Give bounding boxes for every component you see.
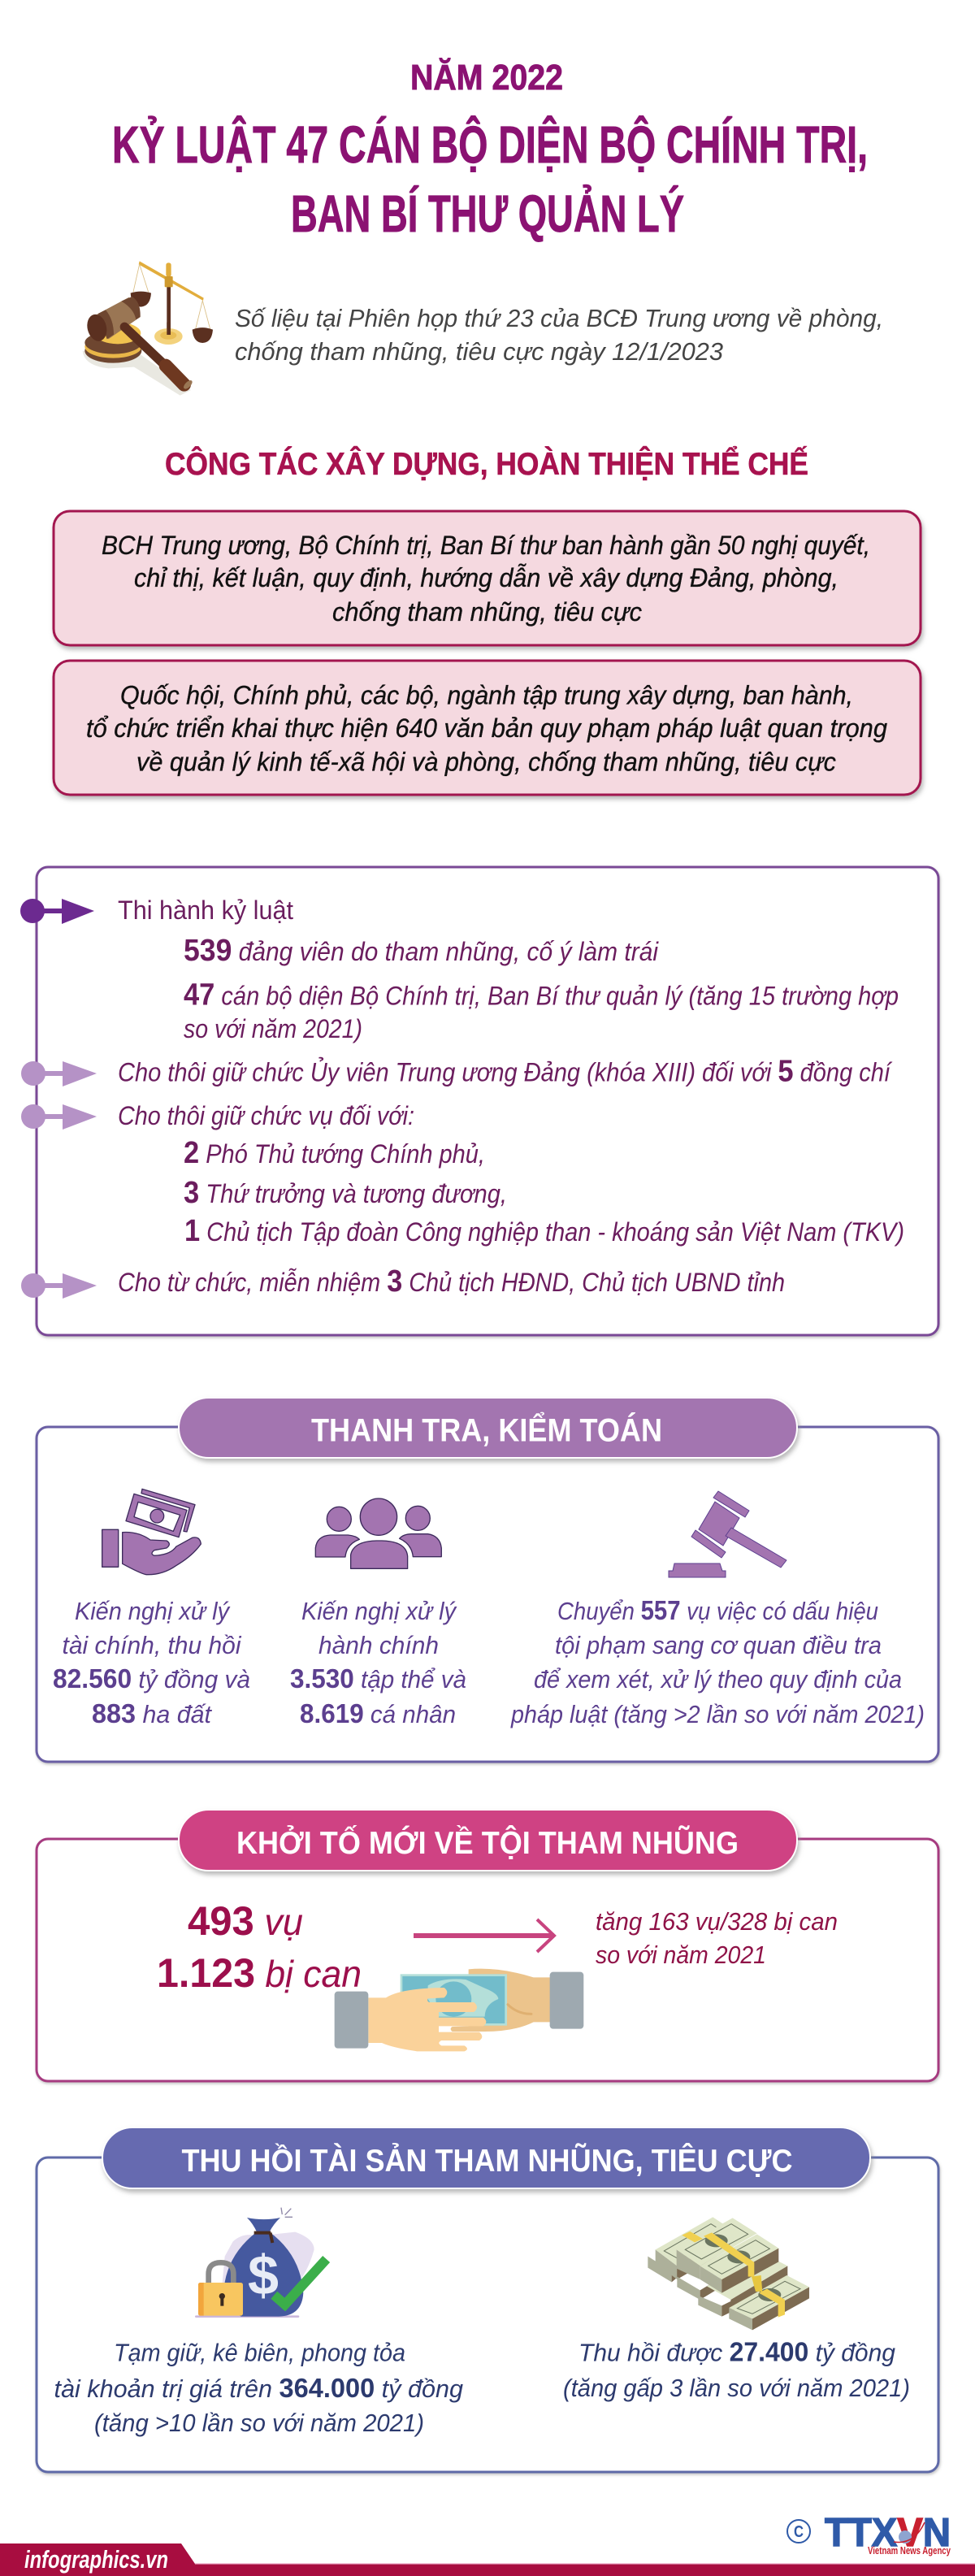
discipline list text: so với năm 2021)	[184, 1014, 362, 1043]
discipline list text: 47 cán bộ diện Bộ Chính trị, Ban Bí thư quản lý (tăng 15 trường hợp	[184, 978, 899, 1013]
column 1 text: 883 ha đất	[92, 1698, 212, 1728]
pill heading: asset recovery: THU HỒI TÀI SẢN THAM NHŨNG, TIÊU CỰC	[182, 2143, 793, 2179]
comparison text: so với năm 2021	[596, 1941, 766, 1969]
discipline list text	[118, 896, 904, 1299]
footer bar	[0, 2543, 975, 2576]
column 3 text: để xem xét, xử lý theo quy định của	[534, 1665, 902, 1693]
title block	[112, 57, 868, 243]
heading: institution building: CÔNG TÁC XÂY DỰNG, HOÀN THIỆN THỂ CHẾ	[165, 445, 808, 482]
column 2 text: 3.530 tập thể và	[290, 1663, 466, 1693]
footer bar: infographics.vn	[24, 2545, 168, 2574]
panel: discipline	[20, 867, 938, 1335]
panel: asset recovery	[37, 2127, 938, 2472]
logo: TTXVN: C	[794, 2523, 804, 2541]
discipline list text: 1 Chủ tịch Tập đoàn Công nghiệp than - khoáng sản Việt Nam (TKV)	[184, 1214, 904, 1248]
pill heading: inspection: THANH TRA, KIỂM TOÁN	[311, 1411, 662, 1448]
discipline list text: 3 Thứ trưởng và tương đương,	[184, 1176, 507, 1210]
icon: gavel purple	[669, 1491, 786, 1577]
icon: money bag with lock and check	[195, 2208, 327, 2318]
left recovery text: tài khoản trị giá trên 364.000 tỷ đồng	[54, 2373, 463, 2403]
arrow	[414, 1919, 554, 1952]
column 2 text: Kiến nghị xử lý	[301, 1597, 457, 1625]
pill heading: inspection	[179, 1398, 797, 1458]
pill heading: asset recovery	[102, 2127, 870, 2188]
discipline list text: Thi hành kỷ luật	[118, 896, 293, 925]
box 1 text: chống tham nhũng, tiêu cực	[332, 597, 642, 627]
box 2 text: về quản lý kinh tế-xã hội và phòng, chống tham nhũng, tiêu cực	[136, 748, 836, 777]
subtitle line 1: Số liệu tại Phiên họp thứ 23 của BCĐ Trung ương về phòng,	[235, 304, 883, 332]
pill heading: prosecutions: KHỞI TỐ MỚI VỀ TỘI THAM NHŨNG	[236, 1824, 739, 1861]
subtitle	[235, 304, 883, 366]
right recovery text: Thu hồi được 27.400 tỷ đồng	[578, 2337, 895, 2366]
box 1 text: BCH Trung ương, Bộ Chính trị, Ban Bí thư ban hành gần 50 nghị quyết,	[102, 531, 870, 560]
icon: money bag with lock and check: $	[248, 2244, 279, 2306]
icon: group of people	[315, 1498, 441, 1568]
column 1 text	[53, 1597, 250, 1728]
bullet arrow 1	[20, 899, 94, 924]
left recovery text: (tăng >10 lần so với năm 2021)	[94, 2409, 424, 2437]
bullet arrow 3	[21, 1104, 97, 1130]
box 2 text: tổ chức triển khai thực hiện 640 văn bản quy phạm pháp luật quan trọng	[86, 713, 887, 743]
column 1 text: tài chính, thu hồi	[62, 1631, 242, 1659]
box 2 text	[86, 681, 887, 777]
panel: inspection and audit	[37, 1398, 938, 1762]
column 2 text: 8.619 cá nhân	[300, 1698, 456, 1728]
box 2 text: Quốc hội, Chính phủ, các bộ, ngành tập trung xây dựng, ban hành,	[120, 681, 853, 710]
title: year: NĂM 2022	[410, 57, 563, 98]
comparison text: tăng 163 vụ/328 bị can	[596, 1907, 838, 1936]
pill heading: prosecutions	[179, 1810, 797, 1871]
comparison text	[596, 1907, 838, 1969]
column 2 text: hành chính	[318, 1631, 439, 1659]
discipline list text: Cho thôi giữ chức Ủy viên Trung ương Đảng (khóa XIII) đối với 5 đồng chí	[118, 1055, 893, 1089]
subtitle line 2: chống tham nhũng, tiêu cực ngày 12/1/2023	[235, 337, 723, 366]
right recovery text	[563, 2337, 910, 2402]
discipline list text: 2 Phó Thủ tướng Chính phủ,	[184, 1136, 485, 1170]
stat: defendants: 1.123 bị can	[157, 1950, 362, 1996]
panel: pink box 2	[54, 661, 921, 795]
right recovery text: (tăng gấp 3 lần so với năm 2021)	[563, 2374, 910, 2402]
title: line 2: BAN BÍ THƯ QUẢN LÝ	[291, 184, 684, 243]
column 1 text: Kiến nghị xử lý	[75, 1597, 231, 1625]
column 3 text	[510, 1595, 925, 1728]
column 1 text: 82.560 tỷ đồng và	[53, 1663, 250, 1693]
box 1 text	[102, 531, 870, 627]
column 3 text: Chuyển 557 vụ việc có dấu hiệu	[557, 1595, 878, 1625]
panel: new prosecutions	[37, 1810, 938, 2081]
icon: gavel and scales	[83, 261, 213, 396]
icon: hands exchanging money	[335, 1969, 583, 2051]
bullet arrow 2	[21, 1061, 97, 1086]
column 2 text	[290, 1597, 466, 1728]
icon: stacks of cash	[648, 2217, 809, 2330]
logo: TTXVN: TTXVN	[825, 2511, 951, 2555]
left recovery text: Tạm giữ, kê biên, phong tỏa	[114, 2339, 405, 2366]
column 3 text: tội phạm sang cơ quan điều tra	[555, 1631, 882, 1659]
box 1 text: chỉ thị, kết luận, quy định, hướng dẫn về xây dựng Đảng, phòng,	[134, 563, 838, 592]
panel: pink box 1	[54, 511, 921, 645]
bullet arrow 4	[21, 1273, 97, 1299]
icon: hand with money	[102, 1489, 201, 1575]
discipline list text: 539 đảng viên do tham nhũng, cố ý làm trái	[184, 934, 659, 968]
column 3 text: pháp luật (tăng >2 lần so với năm 2021)	[510, 1700, 925, 1728]
left recovery text	[54, 2339, 463, 2437]
discipline list text: Cho thôi giữ chức vụ đối với:	[118, 1101, 414, 1130]
discipline list text: Cho từ chức, miễn nhiệm 3 Chủ tịch HĐND, Chủ tịch UBND tỉnh	[118, 1264, 785, 1299]
stat: cases: 493 vụ	[188, 1898, 303, 1944]
